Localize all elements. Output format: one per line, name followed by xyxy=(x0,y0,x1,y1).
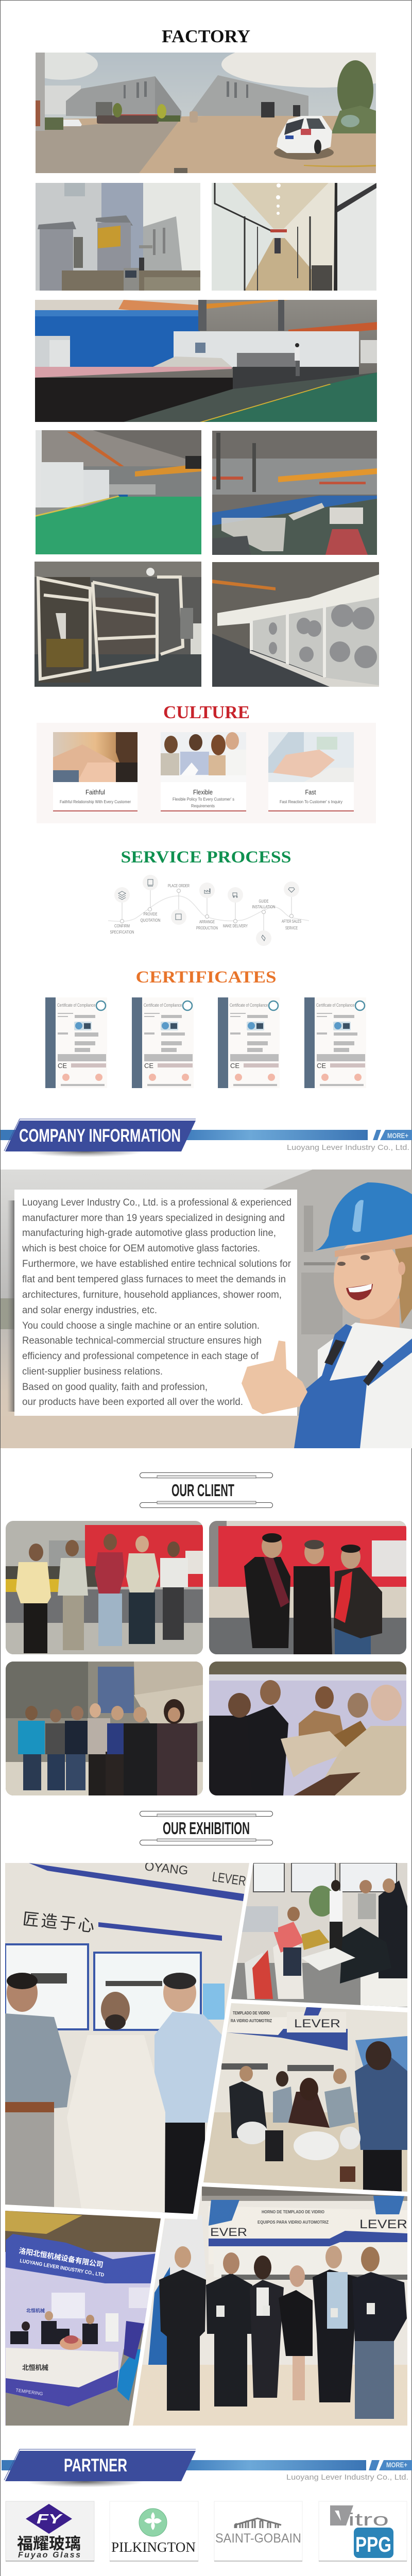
labels: process steps: SERVICE xyxy=(285,926,298,930)
photo: exhibition, Lever booth meeting: RA VIDRIO AUTOMOTRIZ xyxy=(231,2019,272,2023)
company description text: You could choose a single machine or an entire solution. xyxy=(22,1320,260,1331)
photo: exhibition, Lever booth meeting: TEMPLADO DE VIDRIO xyxy=(233,2011,270,2015)
heading: service process: SERVICE PROCESS xyxy=(121,848,291,867)
section banner: company information xyxy=(1,1119,412,1157)
photo: exhibition, Shanghai booth xyxy=(5,2211,162,2427)
photo: exhibition, team of six at booth: EQUIPOS PARA VIDRIO AUTOMOTRIZ xyxy=(258,2220,329,2225)
partner logo: Vitro PPG xyxy=(319,2501,407,2562)
photo: clients meeting at table xyxy=(209,1662,406,1795)
photo: exhibition, three men at booth: OYANG xyxy=(144,1859,189,1878)
icons: process steps xyxy=(118,879,295,941)
labels: process steps: PLACE ORDER xyxy=(168,884,190,888)
company description text: our products have been exported all over the world. xyxy=(22,1397,243,1408)
counter base text: TEMPERING xyxy=(15,2387,43,2396)
certificate 1: Certificate of Compliance xyxy=(57,1003,95,1008)
labels: process steps: CONFIRM xyxy=(114,924,130,928)
card title: Fast xyxy=(305,788,316,796)
photo: exhibition, team of six at booth: LEVER xyxy=(359,2217,407,2231)
company description text: which is best choice for OEM automotive glass factories. xyxy=(22,1243,260,1254)
labels: process steps: ARRANGE xyxy=(199,920,215,924)
partner logo: Fuyao Glass: FY xyxy=(37,2511,63,2527)
card title: Faithful xyxy=(85,788,105,796)
company description text: Furthermore, we have established entire technical solutions for xyxy=(22,1259,291,1269)
company description text: architectures, furniture, household appliances, shower room, xyxy=(22,1290,282,1300)
section banner: company information: Luoyang Lever Industry Co., Ltd. xyxy=(287,1143,409,1152)
heading: our exhibition xyxy=(140,1811,273,1845)
labels: process steps: MAKE DELIVERY xyxy=(223,924,248,928)
heading: culture: CULTURE xyxy=(163,702,250,722)
section banner: company information: COMPANY INFORMATION xyxy=(19,1126,181,1146)
certificate 2 xyxy=(132,997,194,1088)
panel: culture cards xyxy=(37,723,376,823)
photo: clients group of seven xyxy=(6,1662,203,1795)
certificate 2: Certificate of Compliance xyxy=(144,1003,182,1008)
section banner: partner: MORE+ xyxy=(386,2461,407,2469)
section banner: partner xyxy=(2,2449,412,2487)
sign text english: LUOYANG LEVER INDUSTRY CO., LTD xyxy=(19,2258,105,2278)
sign text: 洛阳北恒机械设备有限公司 xyxy=(18,2246,104,2269)
labels: process steps: SPECIFICATION xyxy=(110,930,134,935)
photo: roller furnace frames xyxy=(35,562,201,687)
photo: cooling section ducts xyxy=(212,562,379,688)
photo: exhibition, booth lounge xyxy=(231,1863,407,2009)
photo: exhibition, team of six at booth xyxy=(133,2187,407,2426)
chart: service process timeline xyxy=(108,875,309,946)
partner logo: Pilkington xyxy=(110,2501,198,2562)
photo: exhibition, Lever booth meeting: LEVER xyxy=(294,2017,340,2030)
photo: exhibition, team of six at booth: EVER xyxy=(210,2226,247,2239)
partner logo: Vitro PPG: itro xyxy=(348,2510,389,2530)
photo: exhibition, team of six at booth: HORNO DE TEMPLADO DE VIDRIO xyxy=(262,2210,324,2214)
wall logo text: 北恒机械 xyxy=(26,2308,45,2313)
photo: exhibition, three men at booth: LEVER xyxy=(211,1869,247,1889)
company description text: manufacturer more than 19 years specialized in designing and xyxy=(22,1213,285,1224)
certificate 4 xyxy=(304,997,366,1088)
heading: our exhibition: OUR EXHIBITION xyxy=(163,1819,250,1838)
card: faithful xyxy=(53,732,138,811)
labels: process steps: AFTER SALES xyxy=(282,919,301,924)
certificate 1: CE xyxy=(58,1062,67,1070)
company description text: Reasonable technical-commercial structure ensures high xyxy=(22,1335,262,1346)
certificate 3: Certificate of Compliance xyxy=(230,1003,268,1008)
certificate 4: CE xyxy=(317,1062,326,1070)
heading: our client: OUR CLIENT xyxy=(171,1481,234,1500)
partner logo: Fuyao Glass: Fuyao Glass xyxy=(18,2551,80,2560)
company description text: flat and bent tempered glass furnaces to meet the demands in xyxy=(22,1274,286,1285)
certificate 1 xyxy=(45,997,107,1088)
photo: exhibition, three men at booth xyxy=(5,1859,252,2221)
heading: factory: FACTORY xyxy=(162,26,250,46)
card: flexible xyxy=(161,732,246,811)
photo: exhibition, three men at booth: 匠造于心 xyxy=(22,1909,95,1936)
card: fast xyxy=(268,732,354,811)
photo: factory gate xyxy=(36,183,200,291)
labels: process steps: PRODUCTION xyxy=(196,926,218,930)
photo: tempering furnace line xyxy=(35,300,377,422)
labels: process steps: QUOTATION xyxy=(140,918,161,923)
counter logo text: 北恒机械 xyxy=(22,2364,48,2371)
partner logo: Fuyao Glass: 福耀玻璃 xyxy=(17,2535,81,2553)
certificate 4: Certificate of Compliance xyxy=(316,1003,354,1008)
photo: workshop assembly frames xyxy=(212,431,377,555)
section banner: partner: PARTNER xyxy=(64,2455,127,2476)
partner logo: Saint-Gobain: SAINT-GOBAIN xyxy=(215,2531,301,2546)
certificate 2: CE xyxy=(144,1062,153,1070)
company description text: client-supplier business relations. xyxy=(22,1366,163,1377)
company description text: Based on good quality, faith and profession, xyxy=(22,1382,208,1393)
card text: Faithful Relationship With Every Customer xyxy=(60,800,131,804)
card text: Fast Reaction To Customer' s Inquiry xyxy=(280,800,342,804)
partner logo: Saint-Gobain xyxy=(214,2501,302,2562)
partner logo: Pilkington: PILKINGTON xyxy=(111,2539,196,2555)
text box shadow xyxy=(7,1200,14,1412)
labels: process steps: INSTALLATION xyxy=(252,905,276,909)
text box xyxy=(14,1190,297,1416)
partner logo: Vitro PPG: PPG xyxy=(355,2532,391,2556)
panel: company introduction xyxy=(1,1170,412,1448)
photo: factory panorama xyxy=(36,53,376,173)
heading: our client xyxy=(140,1472,273,1507)
partner logo: Fuyao Glass xyxy=(6,2501,94,2562)
card text line 2: Requirements xyxy=(191,804,215,808)
section banner: partner: Luoyang Lever Industry Co., Ltd. xyxy=(286,2473,408,2482)
illustration: worker in helmet giving thumbs up xyxy=(242,1182,412,1448)
heading: certificates: CERTIFICATES xyxy=(136,968,276,987)
card title: Flexible xyxy=(193,788,213,796)
photo: workshop green floor xyxy=(36,430,201,554)
labels: process steps xyxy=(110,884,301,935)
company description text: Luoyang Lever Industry Co., Ltd. is a professional & experienced xyxy=(22,1197,291,1208)
company description text: manufacturing high-grade automotive glass production line, xyxy=(22,1228,276,1239)
company description text: efficiency and professional competence in each stage of xyxy=(22,1351,259,1362)
photo: office corridor xyxy=(212,183,376,291)
labels: process steps: GUIDE xyxy=(259,899,269,904)
card text: Flexible Policy To Every Customer' s xyxy=(173,797,234,802)
certificate 3: CE xyxy=(230,1062,239,1070)
company description text: and solar energy industries, etc. xyxy=(22,1305,157,1316)
certificate 3 xyxy=(218,997,280,1088)
photo: clients at red furnace, three men xyxy=(209,1521,406,1654)
photo: clients at red furnace, five men xyxy=(6,1521,203,1654)
company description text xyxy=(22,1197,291,1408)
labels: process steps: PROVIDE xyxy=(143,912,158,917)
photo: exhibition, Lever booth meeting xyxy=(203,2003,407,2195)
